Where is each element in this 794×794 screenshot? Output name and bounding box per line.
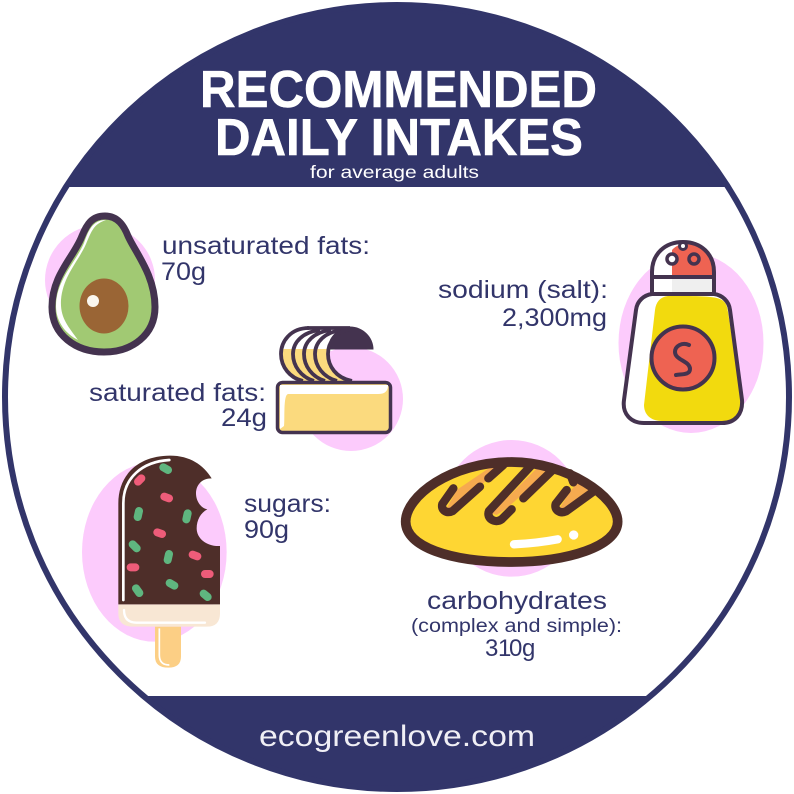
subtitle: for average adults xyxy=(310,162,479,182)
label: saturated fats: 24g xyxy=(221,404,267,432)
label: carbohydrates xyxy=(411,587,622,662)
label: unsaturated fats xyxy=(161,232,370,286)
icon: salt shaker xyxy=(618,242,764,433)
label: sugars: sugars: xyxy=(244,490,331,518)
label: carbohydrates: carbohydrates xyxy=(427,587,607,615)
label: sugars: 90g xyxy=(244,516,289,544)
title: DAILY INTAKES xyxy=(215,109,583,167)
label: saturated fats xyxy=(89,379,267,432)
label: carbohydrates: (complex and simple): xyxy=(411,616,622,637)
icon: ice pop xyxy=(82,456,227,668)
icon: bread xyxy=(406,440,618,577)
label: carbohydrates: 310g xyxy=(485,635,535,662)
label: sodium: sodium (salt): xyxy=(438,276,608,304)
header band xyxy=(70,8,724,187)
label: saturated fats: saturated fats: xyxy=(89,379,266,407)
footer website: ecogreenlove.com xyxy=(259,720,535,753)
icon: butter xyxy=(278,326,403,451)
label: sodium: 2,300mg xyxy=(502,304,607,332)
title xyxy=(200,61,597,167)
title: RECOMMENDED xyxy=(200,61,597,119)
label: sodium xyxy=(438,276,608,332)
label: sugars xyxy=(244,490,331,544)
label: unsaturated fats: unsaturated fats: xyxy=(162,232,370,260)
label: unsaturated fats: 70g xyxy=(161,258,206,286)
footer band xyxy=(148,696,646,786)
icon: avocado xyxy=(45,216,155,352)
